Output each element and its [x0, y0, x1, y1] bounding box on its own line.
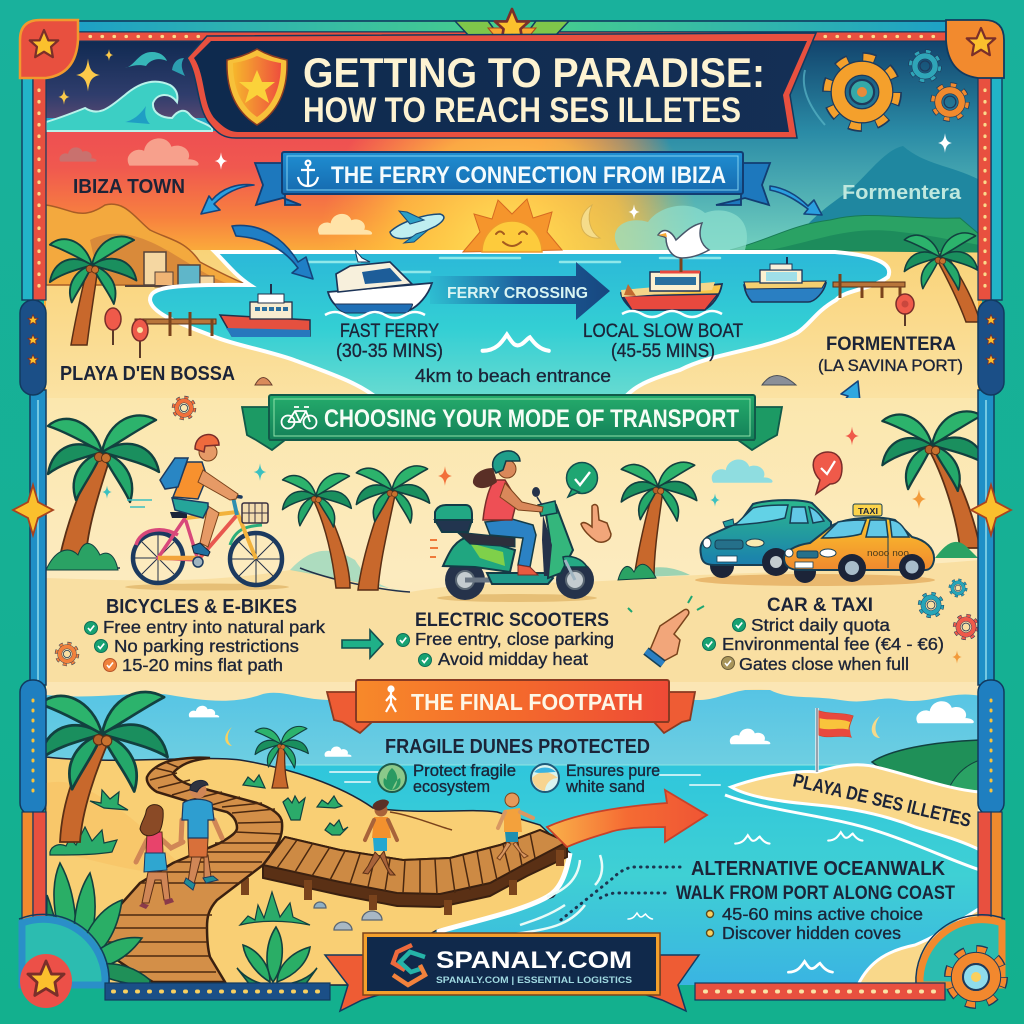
crescent moon with stars	[581, 204, 640, 238]
scooter and rider	[430, 451, 597, 602]
text: electric scooters: Free entry, close parking	[415, 629, 614, 649]
right mountain: Formentera	[615, 133, 980, 252]
title banner	[187, 33, 816, 138]
labels: ferry section places: (LA SAVINA PORT)	[818, 356, 963, 375]
bicycle and rider	[125, 435, 289, 590]
text: car and taxi: Gates close when full	[739, 654, 909, 674]
left boat	[220, 284, 310, 337]
dunes and beach	[46, 757, 602, 985]
text: fragile dunes protected: FRAGILE DUNES PROTECTED	[385, 736, 650, 758]
text: local slow boat: (45-55 MINS)	[611, 341, 715, 362]
wave illustration	[46, 52, 218, 131]
fast ferry	[325, 250, 432, 318]
labels: ferry section places: Formentera	[842, 182, 962, 204]
text: bicycles and e-bikes: Free entry into natural park	[103, 617, 325, 637]
arrow: ferry crossing	[430, 262, 610, 320]
beach grass tufts	[50, 775, 348, 925]
text: car and taxi: CAR & TAXI	[767, 595, 873, 616]
panel: transport modes background	[46, 398, 978, 693]
text: fragile dunes protected: Protect fragile	[413, 762, 516, 780]
rocks on path	[314, 902, 382, 930]
frame: bottom strip	[19, 914, 1005, 1000]
right boat and pier	[744, 257, 914, 326]
corner: bottom left star	[20, 954, 72, 1008]
text: alternative oceanwalk: WALK FROM PORT ALONG COAST	[676, 883, 955, 904]
banner: choosing mode heading: CHOOSING YOUR MODE OF TRANSPORT	[324, 405, 739, 433]
foam wave mid sea	[483, 335, 549, 351]
palm: Ibiza beach	[50, 236, 136, 345]
text: electric scooters: Avoid midday heat	[438, 649, 588, 669]
person walking ahead	[497, 793, 533, 860]
text: bicycles and e-bikes: 15-20 mins flat path	[122, 655, 283, 675]
text: fragile dunes protected: ecosystem	[413, 778, 490, 796]
corner: top left star	[20, 20, 78, 78]
people on boardwalk	[136, 780, 222, 909]
text: car and taxi: Strict daily quota	[751, 615, 890, 635]
icon: pointing hand	[628, 596, 704, 664]
logo banner: SPANALY.COM | ESSENTIAL LOGISTICS	[436, 975, 632, 986]
top center star	[488, 9, 536, 42]
local slow boat with seagull	[621, 223, 722, 317]
rocks on sand	[255, 376, 796, 385]
text: local slow boat: LOCAL SLOW BOAT	[583, 321, 743, 342]
text: alternative oceanwalk	[676, 858, 955, 943]
logo banner	[325, 933, 699, 1011]
text: fast ferry	[336, 321, 443, 362]
text: alternative oceanwalk: Discover hidden coves	[722, 923, 901, 943]
cars: yellow taxi: nooo noo	[867, 548, 909, 559]
corner: bottom right gear	[952, 953, 1000, 1001]
text: bicycles and e-bikes: No parking restrictions	[114, 636, 299, 656]
text: local slow boat	[583, 321, 743, 362]
icon: bicycle	[282, 407, 316, 428]
text: fast ferry: FAST FERRY	[340, 321, 439, 342]
text: distance to beach: 4km to beach entrance	[415, 366, 611, 386]
sea: ferry crossing	[150, 252, 889, 405]
banner: final footpath heading: THE FINAL FOOTPATH	[411, 689, 643, 715]
labels: ferry section places: IBIZA TOWN	[73, 176, 185, 198]
arrow: bikes to scooters	[342, 630, 383, 658]
sand bottom right	[858, 905, 985, 985]
text: bicycles and e-bikes: BICYCLES & E-BIKES	[106, 596, 297, 618]
palms: middle pair	[283, 466, 430, 590]
banner: ferry connection heading	[255, 152, 770, 205]
dotted walking route	[557, 867, 680, 923]
text: electric scooters: ELECTRIC SCOOTERS	[415, 610, 609, 631]
icon: walking person	[386, 686, 396, 712]
crescent moons and foam waves	[225, 716, 880, 972]
gear: top of cyclist section	[175, 399, 193, 417]
blue curved arrows	[201, 185, 860, 440]
palm: cyclist left	[46, 415, 159, 570]
text: alternative oceanwalk: 45-60 mins active choice	[722, 904, 923, 924]
text: fragile dunes protected: white sand	[565, 778, 645, 796]
labels: ferry section places: PLAYA D'EN BOSSA	[60, 363, 235, 385]
text: car and taxi: Environmental fee (€4 - €6)	[722, 634, 944, 654]
banner: ferry connection heading: THE FERRY CONNECTION FROM IBIZA	[331, 162, 726, 189]
corner: top right star	[946, 20, 1004, 78]
icon: S logo	[393, 945, 425, 985]
title banner: GETTING TO PARADISE:	[303, 49, 765, 96]
big orange arrow	[547, 790, 707, 847]
icon: wave and sand	[531, 764, 559, 792]
text: car and taxi	[702, 595, 944, 674]
arrow: ferry crossing: FERRY CROSSING	[447, 285, 588, 302]
text: fragile dunes protected: Ensures pure	[566, 762, 660, 780]
clouds at sunset left	[60, 138, 227, 170]
logo banner: SPANALY.COM	[436, 947, 632, 974]
plane icon	[390, 211, 444, 243]
icon: leaf	[378, 764, 406, 792]
gears beside text	[58, 581, 976, 664]
destination beach: Playa de Ses Illetes	[725, 740, 980, 870]
top right gears	[804, 53, 965, 125]
destination beach: Playa de Ses Illetes: PLAYA DE SES ILLETES	[791, 770, 973, 832]
panel: final footpath background	[46, 682, 980, 985]
banner: final footpath heading	[327, 680, 695, 733]
frame: top strip	[62, 21, 966, 41]
text: fragile dunes protected	[378, 736, 660, 796]
left hill and town	[46, 204, 248, 287]
boardwalk	[103, 758, 567, 982]
banner: choosing mode heading	[242, 395, 782, 450]
labels: ferry section places: FORMENTERA	[826, 334, 956, 355]
labels: ferry section places	[60, 176, 963, 385]
palm: Formentera beach	[904, 233, 980, 322]
panel: ferry scene background	[44, 40, 982, 410]
decorative night stars	[58, 49, 113, 105]
icons: speech checks and hand	[102, 427, 926, 542]
person walking	[363, 800, 397, 875]
cars: yellow taxi: TAXI	[858, 506, 878, 516]
title banner: HOW TO REACH SES ILLETES	[303, 91, 741, 130]
cars: teal car	[695, 500, 935, 586]
palm: footpath left	[40, 692, 168, 842]
palm: right edge	[882, 411, 984, 558]
palm: near cars	[618, 462, 697, 580]
text: electric scooters	[396, 610, 614, 669]
left pier and signposts	[105, 308, 216, 358]
side stars	[13, 485, 1011, 535]
text: alternative oceanwalk: ALTERNATIVE OCEANWALK	[691, 858, 946, 880]
icon: anchor	[298, 161, 318, 186]
text: bicycles and e-bikes	[84, 596, 325, 675]
sun with smiling face	[463, 199, 562, 252]
cars: yellow taxi	[784, 504, 934, 583]
small cloud near plane	[318, 214, 372, 235]
palm: small on dune	[255, 726, 308, 788]
plants foreground	[46, 863, 317, 985]
icon: shield	[227, 49, 287, 125]
sand dunes in transport panel	[46, 460, 980, 693]
flag on beach	[817, 708, 853, 772]
text: fast ferry: (30-35 MINS)	[336, 341, 443, 362]
